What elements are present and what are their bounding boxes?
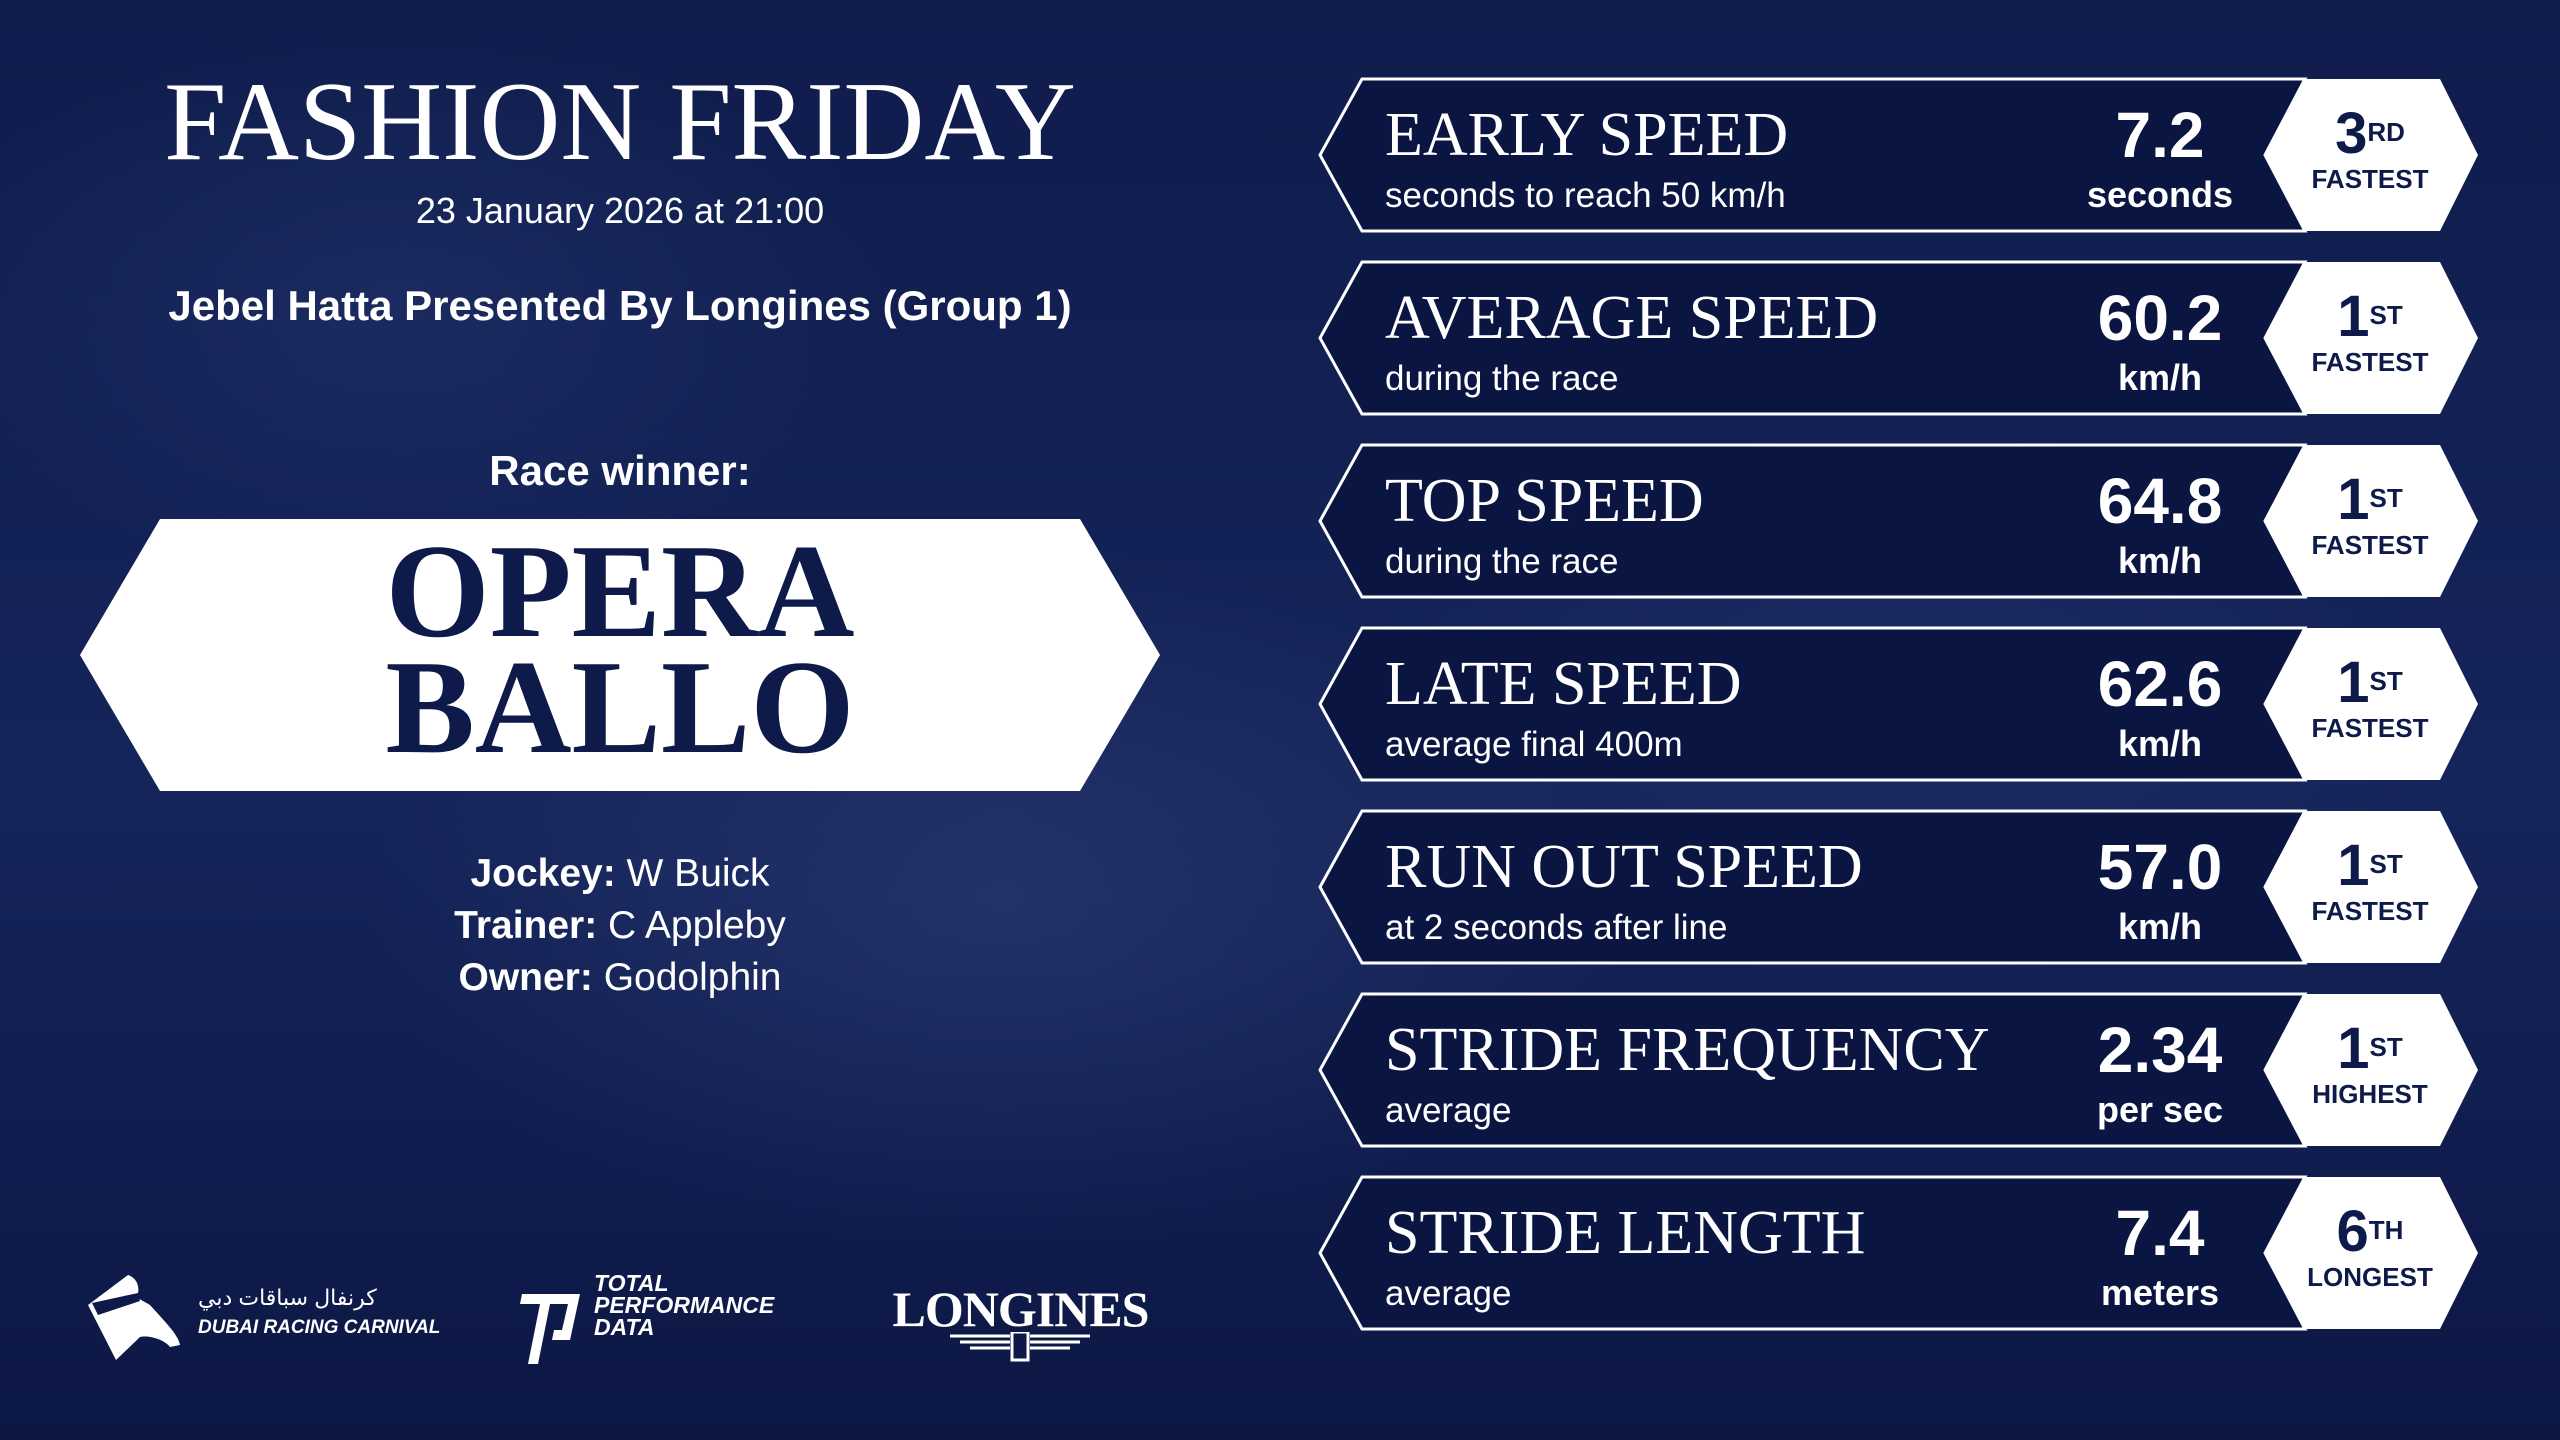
row: early speed: EARLY SPEED [1385,101,1788,169]
row: late speed: 62.6 [2098,648,2222,720]
winner name: OPERA [386,517,854,665]
row: average speed: 60.2 [2098,282,2222,354]
row: stride length [1318,1176,2478,1330]
row: late speed: FASTEST [2311,713,2428,743]
connections [454,852,786,999]
date: 23 January 2026 at 21:00 [416,190,824,231]
row: top speed [1318,444,2478,598]
row: run out speed: FASTEST [2311,896,2428,926]
row: top speed: during the race [1385,542,1618,581]
row: stride frequency: 1ST [2337,1016,2403,1081]
row: early speed [1318,78,2478,232]
row: stride frequency: per sec [2097,1089,2223,1130]
row: stride length: STRIDE LENGTH [1385,1199,1865,1267]
logo: longines [893,1281,1148,1362]
row: late speed: average final 400m [1385,725,1683,764]
row: late speed: 1ST [2337,650,2403,715]
connections: Owner: Godolphin [458,956,782,999]
row: average speed: 1ST [2337,284,2403,349]
row: run out speed: RUN OUT SPEED [1385,833,1863,901]
row: early speed: 3RD [2335,101,2405,166]
logo: total performance data: PERFORMANCE [594,1292,774,1318]
row: early speed: seconds to reach 50 km/h [1385,176,1786,215]
row: early speed: FASTEST [2311,164,2428,194]
row: stride frequency [1318,992,2478,1148]
row: stride length: meters [2101,1272,2219,1313]
row: run out speed: 57.0 [2098,831,2222,903]
logo: dubai racing carnival [88,1275,440,1360]
logo: dubai racing carnival: DUBAI RACING CARNIVAL [198,1317,440,1338]
race winner label: Race winner: [489,447,751,494]
winner banner [80,517,1160,791]
row: average speed: km/h [2118,357,2202,398]
row: late speed: LATE SPEED [1385,650,1742,718]
row: stride length: average [1385,1274,1511,1313]
row: run out speed [1318,810,2478,964]
row: average speed [1318,260,2478,416]
row: top speed: km/h [2118,540,2202,581]
row: stride frequency: HIGHEST [2312,1079,2428,1109]
row: stride length: LONGEST [2307,1262,2433,1292]
row: average speed: during the race [1385,359,1618,398]
row: average speed: AVERAGE SPEED [1385,284,1878,352]
logo: total performance data: DATA [594,1314,654,1340]
row: late speed [1318,626,2478,782]
row: stride frequency: 2.34 [2098,1014,2222,1086]
row: stride length: 7.4 [2116,1197,2204,1269]
row: stride frequency: STRIDE FREQUENCY [1385,1016,1990,1084]
row: top speed: 1ST [2337,467,2403,532]
winner name: BALLO [385,633,855,781]
row: stride length: 6TH [2337,1199,2403,1264]
logo: total performance data [520,1270,775,1364]
row: late speed: km/h [2118,723,2202,764]
row: run out speed: at 2 seconds after line [1385,908,1727,947]
title: FASHION FRIDAY [164,60,1076,184]
row: top speed: 64.8 [2098,465,2222,537]
row: top speed: FASTEST [2311,530,2428,560]
row: early speed: seconds [2087,174,2233,215]
row: top speed: TOP SPEED [1385,467,1704,535]
logo: total performance data: TOTAL [594,1270,669,1296]
connections: Jockey: W Buick [470,852,770,895]
logo: longines: LONGINES [893,1281,1148,1337]
winner name [385,517,855,781]
race name: Jebel Hatta Presented By Longines (Group 1) [168,282,1072,329]
row: average speed: FASTEST [2311,347,2428,377]
row: run out speed: km/h [2118,906,2202,947]
row: stride frequency: average [1385,1091,1511,1130]
row: early speed: 7.2 [2116,99,2204,171]
connections: Trainer: C Appleby [454,904,786,947]
row: run out speed: 1ST [2337,833,2403,898]
logo: dubai racing carnival: كرنفال سباقات دبي [198,1285,377,1310]
